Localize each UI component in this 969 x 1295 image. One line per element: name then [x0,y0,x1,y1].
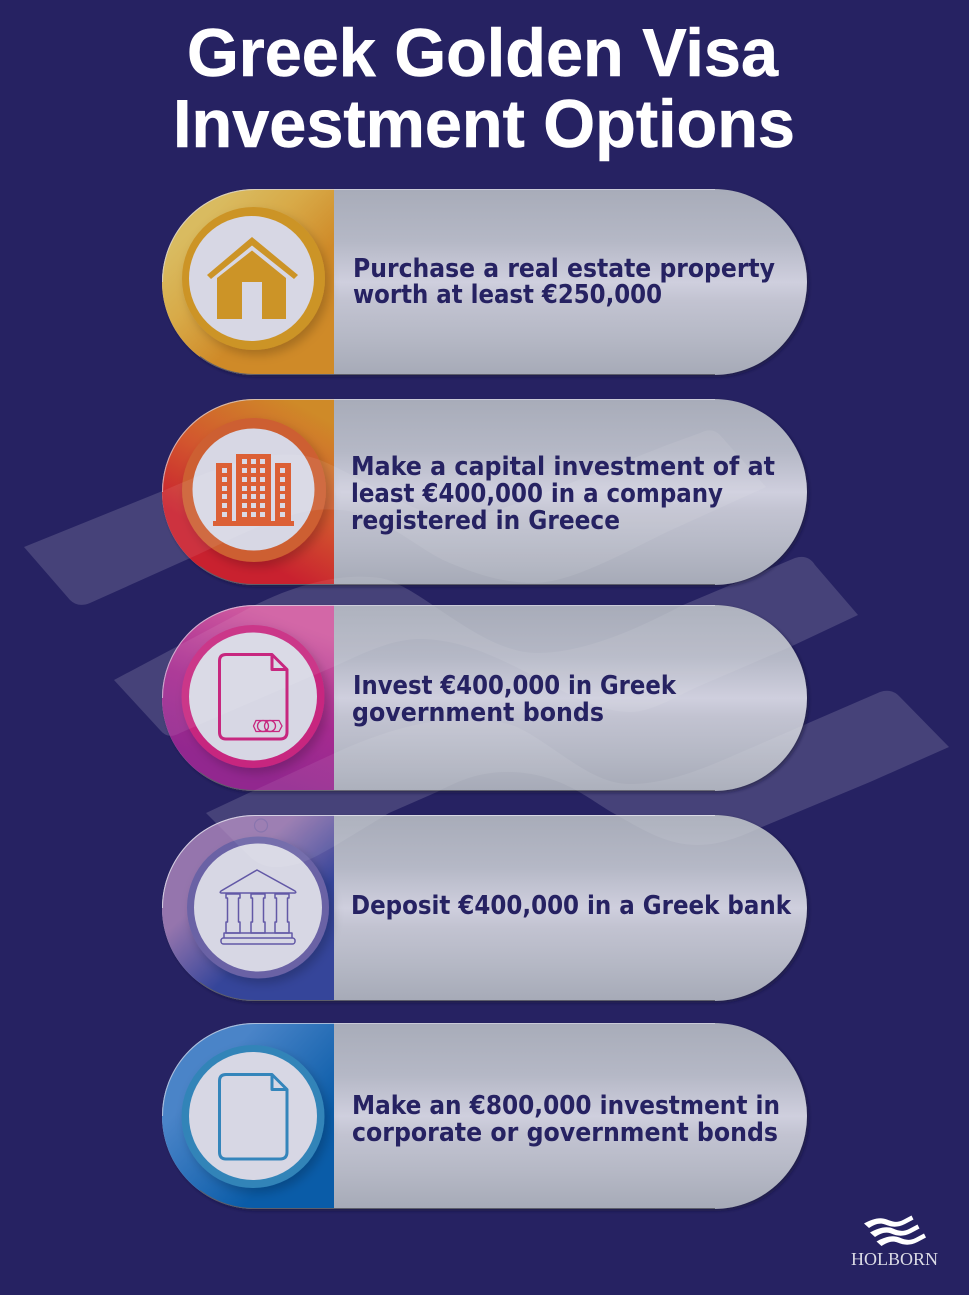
text: option 3: government bonds [352,698,604,728]
text: option 5 [352,1091,780,1148]
text: option 3: Invest €400,000 in Greek [353,671,677,701]
text: option 1: worth at least €250,000 [353,280,662,310]
panel: option 5 pill [162,1023,807,1209]
text: option 1: Purchase a real estate property [353,254,775,284]
text: option 5: corporate or government bonds [352,1118,778,1148]
panel: option 3 pill [162,605,807,791]
panel: option 4 pill [162,815,807,1001]
text: option 2: registered in Greece [351,506,620,536]
title [173,15,795,162]
text: option 2: Make a capital investment of at [351,452,775,482]
icon: document [220,1074,287,1159]
icon: bank [220,870,296,944]
text: option 1 [353,254,775,310]
logo: Holborn: HOLBORN [851,1249,938,1269]
wave ribbons showing through the pills [162,456,715,862]
title: Investment Options [173,86,795,162]
icon: office buildings [213,454,294,526]
panel: option 2 pill [162,399,807,585]
text: option 5: Make an €800,000 investment in [352,1091,780,1121]
text: option 2 [351,452,775,536]
background wave ribbons [24,430,949,867]
text: option 3 [352,671,677,728]
text: option 4: Deposit €400,000 in a Greek bank [351,891,792,921]
icon: government bond document [220,654,287,739]
title: Greek Golden Visa [187,15,779,91]
text: option 2: least €400,000 in a company [351,479,723,509]
logo: Holborn [851,1216,938,1269]
panel: option 1 pill [162,189,807,375]
icon: house [207,237,298,319]
